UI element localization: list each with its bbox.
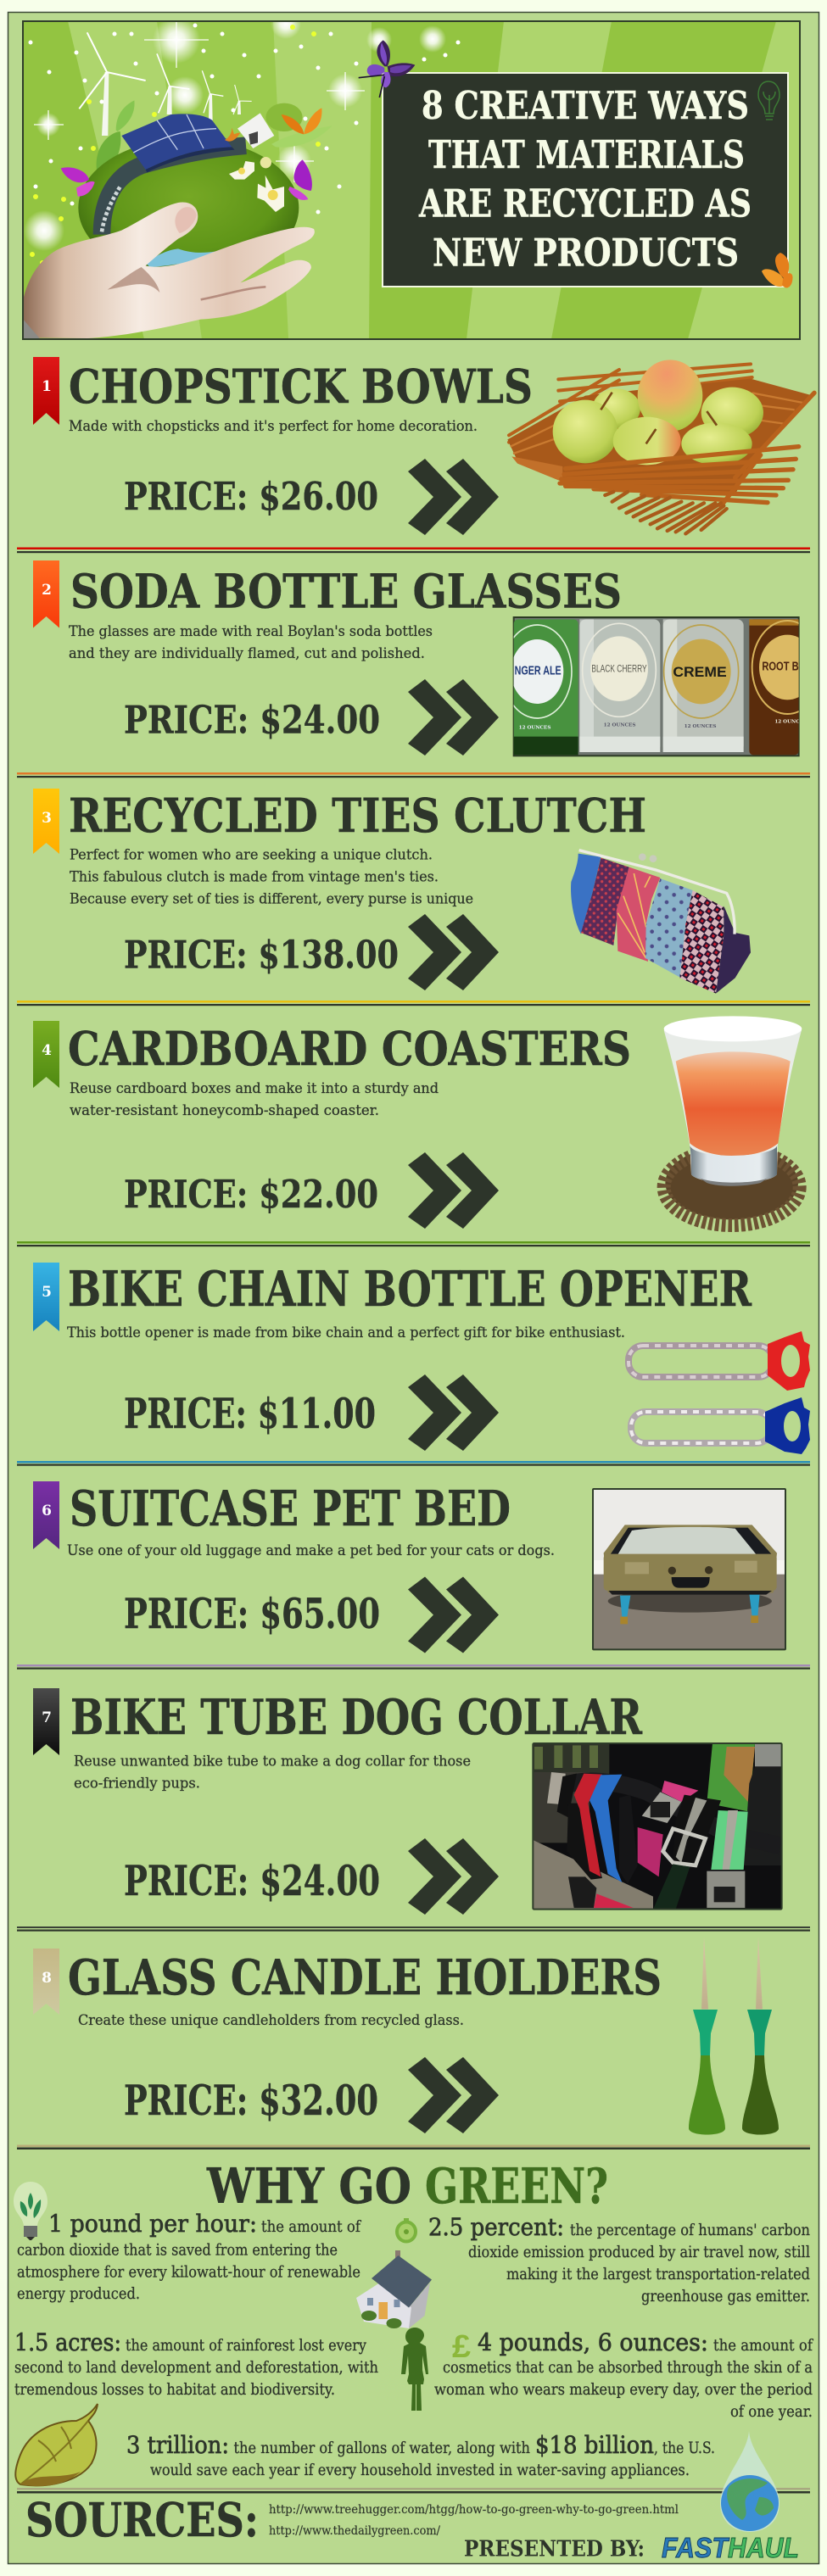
photo: tie clutch: [571, 850, 751, 994]
description: Use one of your old luggage and make a pet bed for your cats or dogs.: [67, 1542, 555, 1559]
wind turbines: [79, 32, 252, 136]
stat: 1.5 acres: second to land development and deforestation, with: [14, 2358, 378, 2377]
orange butterfly over title box corner: [762, 253, 793, 287]
title text: THAT MATERIALS: [428, 132, 745, 177]
stat: 1.5 acres: the amount of rainforest lost every: [126, 2336, 366, 2355]
stat: 3 trillion: the number of gallons of water, along with: [234, 2439, 530, 2457]
divider: [17, 2488, 810, 2493]
stat: 3 trillion: [126, 2431, 715, 2479]
section 8: glass candle holders: [17, 1937, 810, 2149]
water at bottom of globe: [148, 248, 215, 267]
ribbon 6: [33, 1481, 59, 1549]
small orange butterfly: [225, 128, 240, 142]
section 1: chopstick bowls: [17, 357, 814, 553]
icon: pound sign: £: [452, 2329, 471, 2365]
divider: [17, 1241, 810, 1246]
ribbon 1: 1: [42, 378, 52, 395]
heading: why go green: GREEN?: [425, 2158, 608, 2215]
heading: BIKE TUBE DOG COLLAR: [70, 1689, 643, 1746]
divider: [17, 1664, 810, 1670]
ribbon 3: [33, 789, 59, 854]
stat: 1.5 acres: 1.5 acres:: [14, 2328, 121, 2356]
arrow: [408, 914, 499, 990]
solar panel: [121, 114, 235, 172]
photo: glass on coaster: [664, 1016, 802, 1225]
icon: light bulb with leaves: [14, 2182, 47, 2240]
description: [74, 1754, 471, 1793]
leaf behind globe: [97, 100, 134, 170]
description: [70, 1080, 439, 1119]
logo: fasthaul: FAST: [662, 2532, 730, 2563]
photo: soda bottle glasses: 12 OUNCES: [774, 720, 807, 725]
photo: soda bottle glasses: 12 OUNCES: [604, 723, 635, 728]
icon: leaf: [15, 2404, 98, 2486]
photo: soda bottle glasses: BLACK CHERRY: [591, 663, 647, 675]
photo: dog collars on bike bar: [533, 1743, 782, 1910]
stat: 1 pound per hour: 1 pound per hour:: [48, 2210, 257, 2238]
magenta butterfly left: [61, 167, 95, 197]
sparkles: [25, 22, 460, 265]
icon: woman silhouette: [401, 2328, 428, 2411]
heading: SODA BOTTLE GLASSES: [70, 563, 622, 619]
section 7: bike tube dog collar: [17, 1688, 810, 1932]
stat: 1.5 acres: [14, 2328, 378, 2399]
arrow: [408, 1838, 499, 1915]
section 5: bike chain bottle opener: [17, 1261, 810, 1466]
description: Perfect for women who are seeking a unique clutch.: [70, 846, 433, 863]
section 4: cardboard coasters: [17, 1016, 810, 1246]
ribbon 8: [33, 1949, 59, 2015]
description: [70, 846, 473, 907]
ribbon 2: 2: [42, 582, 52, 599]
ribbon 7: [33, 1688, 59, 1755]
divider: [17, 1001, 810, 1006]
bushes and tiny house: [237, 103, 332, 148]
ribbon 6: 6: [42, 1503, 52, 1519]
stat: 4 pounds, 6 ounces: [434, 2328, 814, 2421]
price: PRICE: $32.00: [124, 2076, 378, 2125]
ribbon 1: [33, 357, 59, 425]
ribbon 8: 8: [42, 1970, 52, 1987]
river around globe: [102, 146, 246, 235]
heading: CHOPSTICK BOWLS: [69, 359, 533, 414]
description: and they are individually flamed, cut and polished.: [69, 645, 425, 662]
icon: small light bulb: [758, 81, 780, 120]
stat: 1 pound per hour: carbon dioxide that is saved from entering the: [17, 2240, 338, 2259]
photo: red chain opener: [629, 1331, 810, 1391]
description: Create these unique candleholders from recycled glass.: [78, 2012, 464, 2029]
heading: SUITCASE PET BED: [70, 1480, 511, 1537]
stat: 1.5 acres: tremendous losses to habitat and biodiversity.: [14, 2380, 335, 2399]
icon: house: [356, 2250, 432, 2328]
photo: soda bottle glasses: CREME: [673, 664, 727, 680]
price: PRICE: $65.00: [124, 1589, 380, 1638]
stat: 1 pound per hour: atmosphere for every kilowatt-hour of renewable: [17, 2262, 360, 2281]
price: PRICE: $24.00: [124, 697, 380, 743]
price: PRICE: $26.00: [124, 474, 378, 519]
description: Reuse unwanted bike tube to make a dog collar for those: [74, 1754, 471, 1770]
source links: http://www.thedailygreen.com/: [269, 2524, 440, 2538]
source links: http://www.treehugger.com/htgg/how-to-go-green-why-to-go-green.html: [269, 2503, 679, 2517]
logo: fasthaul: [662, 2532, 799, 2563]
description: eco-friendly pups.: [74, 1776, 200, 1793]
stat: 3 trillion: , the U.S.: [654, 2439, 715, 2457]
purple butterfly over title box: [359, 40, 415, 98]
stat: 3 trillion: would save each year if every household invested in water-saving appliances.: [150, 2461, 690, 2479]
divider: [17, 772, 810, 778]
section 6: suitcase pet bed: [17, 1480, 810, 1670]
description: Made with chopsticks and it's perfect for home decoration.: [69, 418, 478, 435]
stat: 2.5 percent: [428, 2213, 810, 2306]
stat: 1 pound per hour: energy produced.: [17, 2284, 140, 2303]
description: Because every set of ties is different, every purse is unique: [70, 890, 473, 907]
heading: CARDBOARD COASTERS: [68, 1021, 631, 1076]
price: PRICE: $11.00: [124, 1389, 376, 1438]
heading: RECYCLED TIES CLUTCH: [69, 788, 646, 843]
divider: [17, 1926, 810, 1932]
photo: right candle holder: [742, 1937, 779, 2135]
arrow: [408, 2057, 499, 2133]
ribbon 5: 5: [42, 1284, 52, 1301]
heading: why go green: WHY GO: [206, 2158, 411, 2215]
arrow: [408, 1152, 499, 1229]
stat: 2.5 percent: 2.5 percent:: [428, 2213, 564, 2241]
heading: why go green: [206, 2158, 608, 2215]
hand: [23, 203, 315, 338]
stat: 3 trillion: $18 billion: [535, 2431, 654, 2459]
ribbon 4: [33, 1021, 59, 1088]
stat: 4 pounds, 6 ounces: of one year.: [730, 2402, 813, 2421]
photo: soda bottle glasses: 12 OUNCES: [685, 724, 716, 729]
price: PRICE: $22.00: [124, 1172, 378, 1217]
photo: chopstick bowl with apples: [507, 360, 814, 533]
icon: water drop with globe: [720, 2431, 780, 2532]
title text: ARE RECYCLED AS: [418, 181, 752, 226]
hero banner: [23, 8, 800, 339]
section 3: recycled ties clutch: [17, 788, 810, 1006]
ribbon 4: 4: [42, 1042, 52, 1059]
description: This fabulous clutch is made from vintage men's ties.: [70, 868, 439, 885]
sources heading: SOURCES:: [25, 2492, 259, 2547]
river foam: [102, 187, 120, 231]
divider: [17, 548, 810, 553]
photo: soda bottle glasses: 12 OUNCES: [519, 725, 550, 730]
photo: left candle holder: [689, 1937, 725, 2135]
heading: GLASS CANDLE HOLDERS: [68, 1949, 662, 2006]
stat: 4 pounds, 6 ounces: the amount of: [713, 2336, 814, 2355]
magenta butterfly right: [288, 159, 312, 200]
stat: 3 trillion: 3 trillion:: [126, 2431, 229, 2459]
icon: stopwatch: [397, 2218, 416, 2242]
photo: suitcase pet bed: [593, 1489, 785, 1649]
description: The glasses are made with real Boylan's soda bottles: [69, 623, 433, 640]
description: This bottle opener is made from bike chain and a perfect gift for bike enthusiast.: [67, 1324, 625, 1341]
price: PRICE: $138.00: [124, 933, 399, 977]
arrow: [408, 459, 499, 535]
ribbon 3: 3: [42, 810, 52, 827]
divider: [17, 2145, 810, 2149]
sources and credit: [25, 2492, 799, 2563]
title box: [383, 73, 788, 287]
description: water-resistant honeycomb-shaped coaster.: [70, 1102, 379, 1119]
why go green panel: [14, 2158, 814, 2532]
presented by: PRESENTED BY:: [464, 2537, 645, 2562]
divider: [17, 1461, 810, 1466]
logo: fasthaul: HAUL: [728, 2532, 799, 2563]
description: [69, 623, 433, 662]
flowers: [229, 157, 284, 212]
stat: 1 pound per hour: [17, 2210, 362, 2303]
grass globe: [78, 148, 299, 267]
ribbon 2: [33, 560, 59, 627]
arrow: [408, 679, 499, 756]
photo: soda bottle glasses: ROOT B: [762, 661, 799, 674]
hero border: [23, 21, 800, 339]
title text: [418, 83, 752, 275]
arrow: [408, 1374, 499, 1451]
photo: blue chain opener: [631, 1397, 810, 1454]
ribbon 7: 7: [42, 1709, 52, 1726]
description: Reuse cardboard boxes and make it into a sturdy and: [70, 1080, 439, 1097]
photo: soda bottle glasses: NGER ALE: [515, 664, 562, 677]
section 2: soda bottle glasses: [17, 560, 823, 778]
price: PRICE: $24.00: [124, 1856, 380, 1905]
banner background with stripes: [23, 21, 800, 339]
stat: 4 pounds, 6 ounces: 4 pounds, 6 ounces:: [478, 2328, 708, 2356]
source links: [269, 2503, 679, 2538]
photo: soda bottle glasses: [503, 617, 823, 756]
stat: 1 pound per hour: the amount of: [261, 2217, 362, 2236]
title text: 8 CREATIVE WAYS: [422, 83, 749, 128]
ribbon 5: [33, 1263, 59, 1331]
title text: NEW PRODUCTS: [433, 231, 739, 275]
arrow: [408, 1577, 499, 1653]
orange butterfly on globe: [282, 108, 321, 134]
